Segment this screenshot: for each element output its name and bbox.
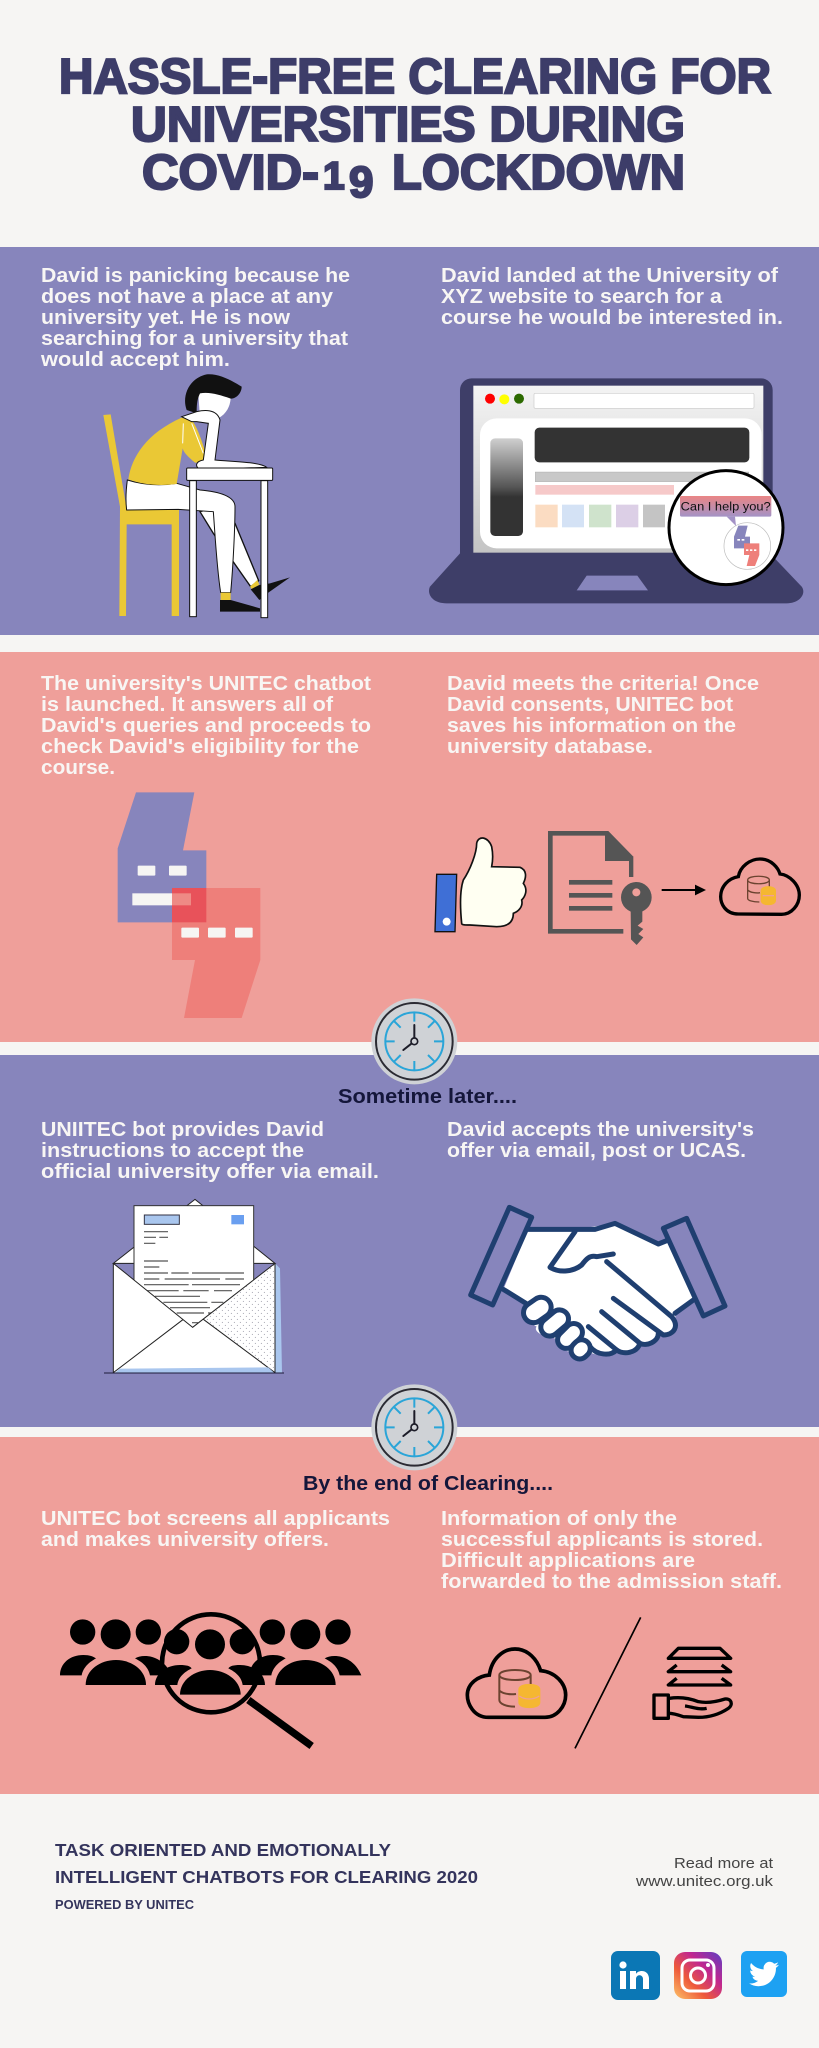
text: chatbot launched: course. — [41, 756, 115, 779]
text: successful applicants stored: successful applicants is stored. — [441, 1528, 763, 1551]
footer: report title: INTELLIGENT CHATBOTS FOR CLEARING 2020 — [55, 1867, 478, 1887]
text: David panicking: does not have a place at any — [41, 285, 334, 308]
title: 9 — [349, 158, 373, 207]
title: UNIVERSITIES DURING — [131, 98, 685, 152]
text: David panicking: would accept him. — [40, 348, 230, 371]
text: David panicking: David is panicking because he — [41, 264, 350, 287]
text: successful applicants stored: Information of only the — [441, 1507, 677, 1530]
text: chatbot launched: David's queries and proceeds to — [41, 714, 371, 737]
text: offer instructions: UNIITEC bot provides David — [41, 1118, 324, 1141]
text: David landed — [441, 264, 783, 329]
text: David panicking — [40, 264, 350, 371]
panel: end of Clearing — [0, 1437, 819, 1794]
text: chatbot launched — [41, 672, 371, 779]
text: David landed: XYZ website to search for a — [441, 285, 723, 308]
title — [59, 50, 771, 207]
text: David panicking: searching for a university that — [41, 327, 348, 350]
footer: read more link: Read more at — [674, 1855, 774, 1872]
text: offer instructions: instructions to accept the — [41, 1139, 304, 1162]
icon: clock two — [371, 1384, 457, 1470]
title: COVID- — [142, 146, 319, 200]
text: successful applicants stored: Difficult applications are — [441, 1549, 695, 1572]
divider slash — [575, 1617, 641, 1748]
icon: clock one — [371, 998, 457, 1084]
icon: Twitter — [741, 1951, 787, 1997]
text: offer instructions: official university offer via email. — [41, 1160, 379, 1183]
text: David landed: course he would be interested in. — [441, 306, 783, 329]
text: David accepts: David accepts the university's — [447, 1118, 754, 1141]
footer: report title — [55, 1840, 478, 1912]
title: 1 — [323, 155, 345, 198]
footer: read more link — [635, 1855, 774, 1890]
title: LOCKDOWN — [392, 146, 685, 200]
heading: Sometime later: Sometime later.... — [338, 1085, 517, 1108]
text: David accepts — [447, 1118, 754, 1162]
text: David meets criteria: saves his information on the — [447, 714, 736, 737]
illustration: laptop with chatbot popup: Can I help you? — [681, 500, 771, 514]
footer: report title: TASK ORIENTED AND EMOTIONALLY — [55, 1840, 391, 1860]
text: David meets criteria — [447, 672, 759, 758]
panel: accepting the offer — [0, 1055, 819, 1427]
panel: chatbot launched — [0, 652, 819, 1042]
text: David panicking: university yet. He is now — [41, 306, 290, 329]
illustration: worried student at desk — [103, 374, 290, 618]
panel: David searching — [0, 247, 819, 635]
text: David landed: David landed at the University of — [441, 264, 778, 287]
icon: consent, secured document and cloud — [435, 831, 799, 945]
icon: handshake — [471, 1207, 725, 1363]
text: chatbot launched: is launched. It answers all of — [41, 693, 333, 716]
text: offer instructions — [41, 1118, 379, 1183]
icon: applicants under magnifying glass — [60, 1614, 361, 1746]
text: David accepts: offer via email, post or UCAS. — [447, 1139, 746, 1162]
heading: By the end of Clearing: By the end of Clearing.... — [303, 1472, 553, 1495]
icon: chat bubbles — [118, 792, 260, 1018]
text: chatbot launched: The university's UNITEC chatbot — [41, 672, 371, 695]
icon: envelope with letter — [104, 1199, 284, 1373]
arrow — [662, 885, 706, 895]
text: David meets criteria: David consents, UNITEC bot — [447, 693, 733, 716]
text: chatbot launched: check David's eligibility for the — [41, 735, 359, 758]
text: successful applicants stored — [441, 1507, 782, 1593]
icon: Instagram — [674, 1952, 722, 1999]
footer: report title: POWERED BY UNITEC — [55, 1898, 194, 1912]
illustration: laptop with chatbot popup — [429, 378, 803, 603]
title: HASSLE-FREE CLEARING FOR — [59, 50, 771, 104]
text: David meets criteria: David meets the criteria! Once — [447, 672, 759, 695]
footer: read more link: www.unitec.org.uk — [635, 1873, 774, 1890]
text: screens applicants: and makes university offers. — [41, 1528, 329, 1551]
text: David meets criteria: university database. — [447, 735, 653, 758]
icon: LinkedIn — [611, 1951, 660, 2000]
text: successful applicants stored: forwarded to the admission staff. — [441, 1570, 782, 1593]
icon: database cloud, divider and papers in hand — [467, 1617, 731, 1748]
text: screens applicants: UNITEC bot screens all applicants — [41, 1507, 390, 1530]
text: screens applicants — [41, 1507, 390, 1551]
